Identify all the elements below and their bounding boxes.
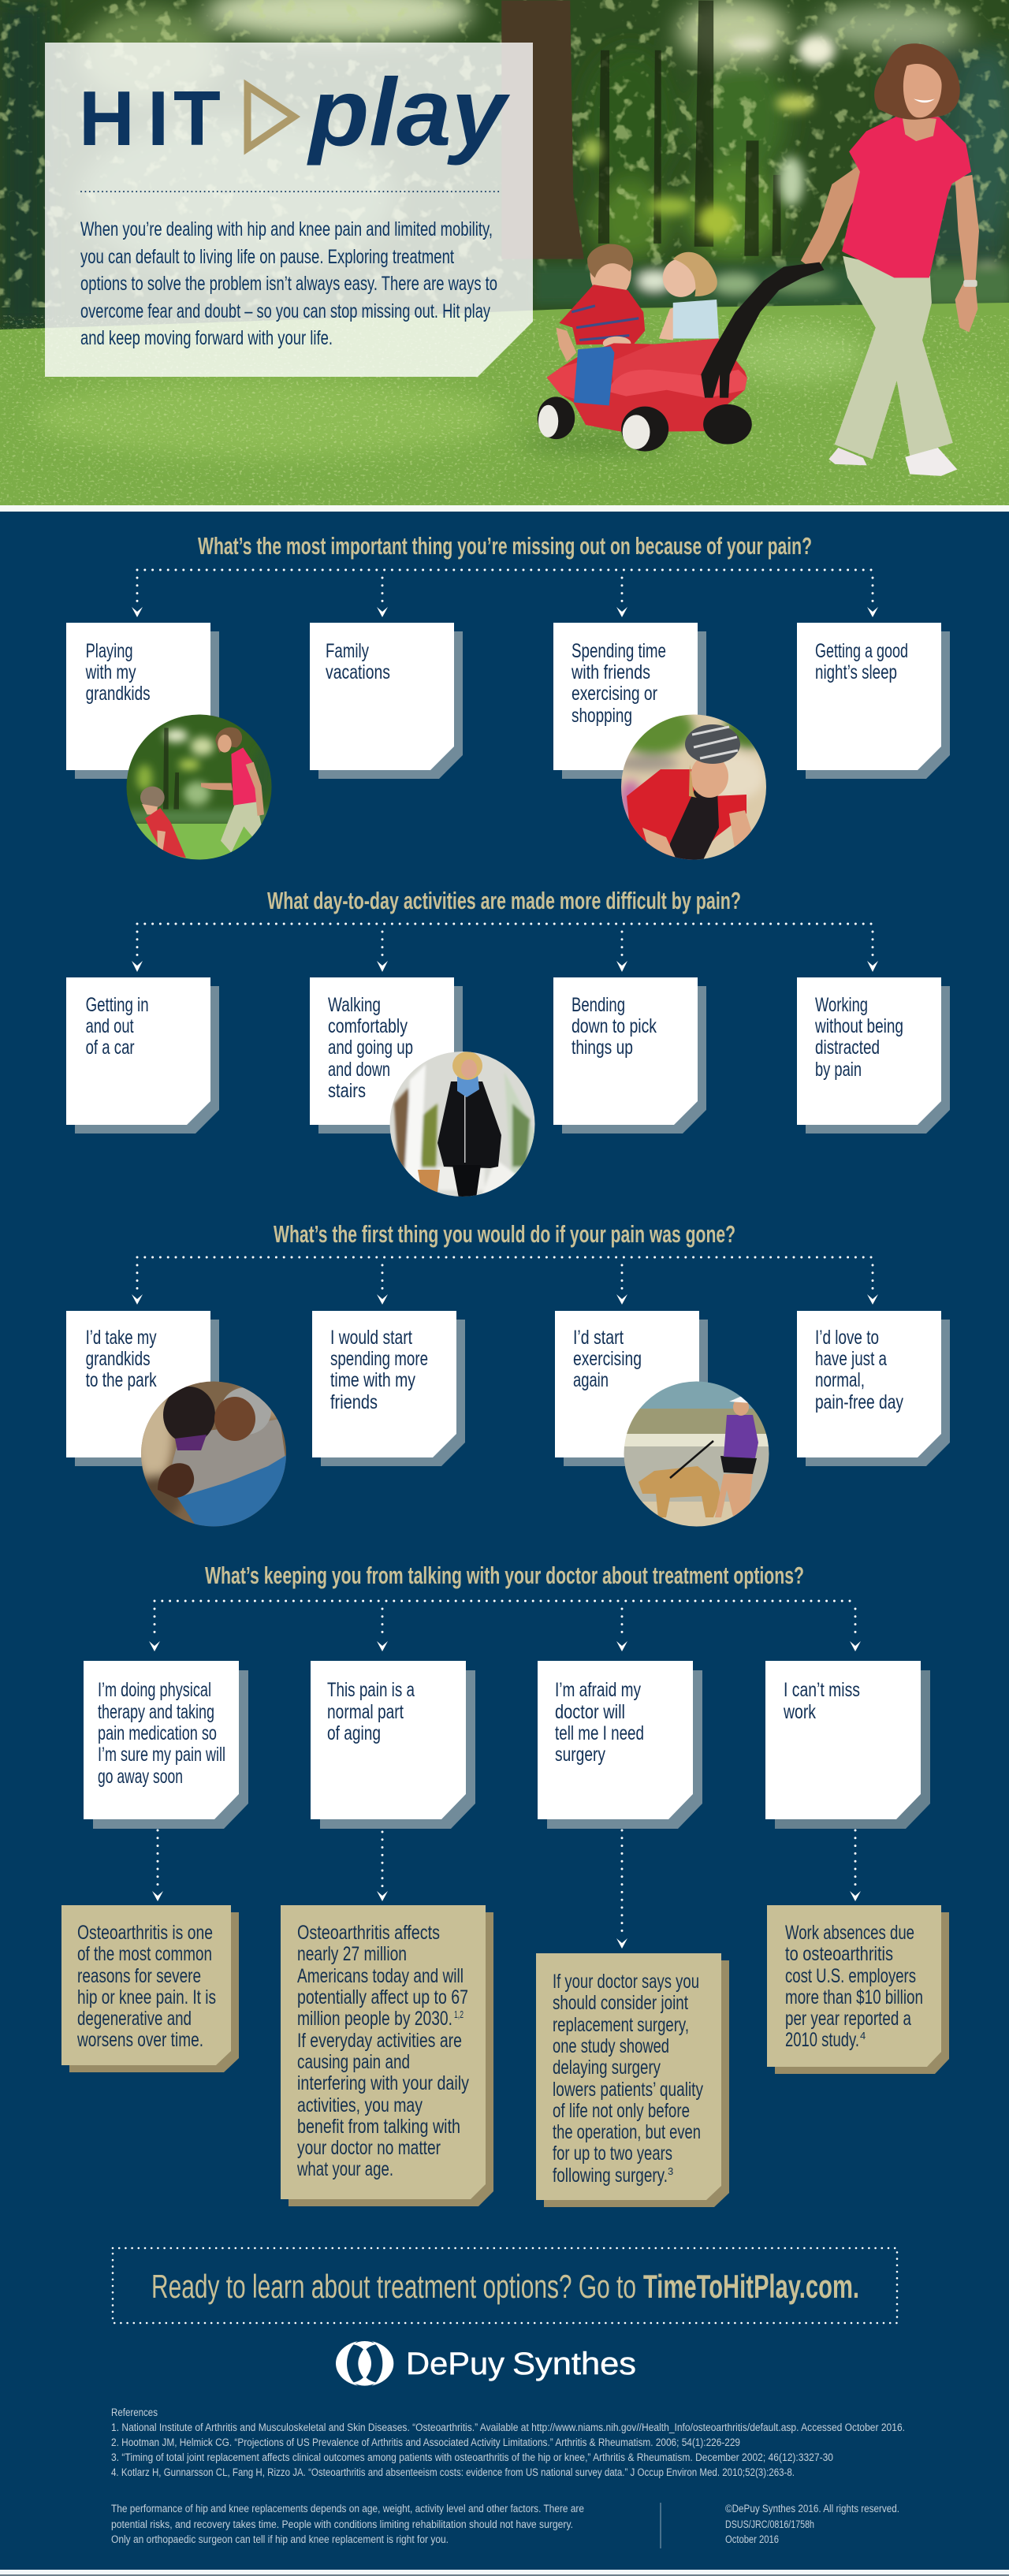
card: time with friends: time with my <box>330 1369 415 1391</box>
dotted connector with arrows <box>132 1257 878 1305</box>
card: playing with grandkids: with my <box>85 661 136 683</box>
card: pain-free day: I’d love to <box>815 1327 879 1349</box>
card: grandkids to the park: I’d take my <box>86 1327 157 1349</box>
fact box: work absences: more than $10 billion <box>785 1986 923 2008</box>
fact box: osteoarthritis reasons: worsens over time. <box>76 2029 203 2051</box>
references: 4. Kotlarz H, Gunnarsson CL, Fang H, Rizzo JA. “Osteoarthritis and absenteeism costs: evidence from US national survey data.” J Occup Environ Med. 2010;52(3):263-8. <box>111 2466 795 2478</box>
references: 1. National Institute of Arthritis and Musculoskeletal and Skin Diseases. “Osteoarthritis.” Available at http://www.niams.nih.gov//Health_Info/osteoarthritis/default.asp. Accessed October 2016. <box>111 2422 905 2433</box>
card: can't miss work: I can’t miss <box>784 1679 860 1701</box>
photo: cyclist <box>621 714 766 859</box>
text: intro paragraph: When you’re dealing with hip and knee pain and limited mobility, <box>80 218 493 240</box>
fact box: osteoarthritis affects millions: Osteoarthritis affects <box>297 1922 440 1944</box>
icon: planter <box>418 1170 440 1192</box>
callout: call to action: Ready to learn about treatment options? Go to <box>151 2268 636 2305</box>
title: Hit play <box>79 58 510 166</box>
section 1: missing out <box>66 532 950 863</box>
card: exercising again <box>555 1311 708 1466</box>
card: walking and stairs: stairs <box>328 1080 366 1102</box>
icon: boy <box>140 787 186 858</box>
card: getting in and out of a car: Getting in <box>86 994 149 1016</box>
card: grandkids to the park: to the park <box>86 1369 157 1391</box>
card: pain-free day: normal, <box>815 1369 865 1391</box>
card: afraid of surgery: doctor will <box>555 1701 625 1723</box>
icon: helmet <box>685 724 740 764</box>
card: time with friends: I would start <box>330 1327 412 1349</box>
card: working without distraction: without being <box>814 1015 903 1037</box>
callout: call to action <box>113 2248 897 2323</box>
card: family vacations: Family <box>326 640 369 662</box>
card: grandkids to the park: grandkids <box>86 1348 151 1370</box>
fact box: delaying surgery: lowers patients’ quality <box>553 2079 703 2101</box>
card: can't miss work <box>765 1661 930 1829</box>
icon: woman walking <box>715 1394 758 1523</box>
card: bending down: things up <box>572 1037 633 1059</box>
fact box: osteoarthritis affects millions: your doctor no matter <box>297 2137 441 2159</box>
section 3: first thing if pain was gone <box>66 1220 950 1529</box>
card: time with friends: spending more <box>330 1348 428 1370</box>
fact box: work absences: 2010 study. <box>785 2029 859 2051</box>
card: physical therapy <box>84 1661 248 1829</box>
dotted connector with arrows <box>132 570 878 617</box>
dotted connector with arrows <box>132 924 878 972</box>
card: getting in and out of a car <box>66 977 219 1134</box>
icon: play triangle <box>248 86 294 148</box>
disclaimer: potential risks, and recovery takes time. People with conditions limiting rehabilitation should not have surgery. <box>111 2518 573 2530</box>
card: exercising again: again <box>573 1369 609 1391</box>
fact box: osteoarthritis reasons <box>61 1905 239 2072</box>
card: physical therapy: I’m doing physical <box>98 1679 211 1701</box>
card: spending time: Spending time <box>572 640 666 662</box>
text: intro paragraph: options to solve the problem isn’t always easy. There are ways to <box>80 273 497 295</box>
heading: What’s the first thing you would do if your pain was gone? <box>274 1220 735 1248</box>
icon: woman in black coat <box>437 1052 501 1198</box>
fact box: delaying surgery: the operation, but even <box>553 2121 701 2143</box>
fact box: delaying surgery: should consider joint <box>553 1992 688 2014</box>
fact box: osteoarthritis affects millions: 1,2 <box>454 2008 464 2020</box>
card: family vacations <box>310 623 463 779</box>
fact box: osteoarthritis reasons: of the most common <box>77 1943 212 1965</box>
fact box: osteoarthritis affects millions: causing pain and <box>297 2051 410 2073</box>
card: good night's sleep <box>797 623 950 779</box>
icon: woman <box>201 728 264 853</box>
copyright: DSUS/JRC/0816/1758h <box>725 2518 814 2530</box>
disclaimer: The performance of hip and knee replacements depends on age, weight, activity level and other factors. There are <box>111 2503 584 2515</box>
card: physical therapy: I’m sure my pain will <box>98 1744 225 1766</box>
card: physical therapy: pain medication so <box>98 1722 217 1744</box>
card: walking and stairs: comfortably <box>328 1015 408 1037</box>
panel: intro with logo and description <box>45 43 533 377</box>
fact box: delaying surgery: delaying surgery <box>553 2057 661 2079</box>
text: intro paragraph <box>80 218 497 349</box>
fact box: delaying surgery: If your doctor says you <box>553 1971 699 1993</box>
fact box: osteoarthritis affects millions: interfering with your daily <box>297 2072 469 2094</box>
copyright: ©DePuy Synthes 2016. All rights reserved. <box>725 2503 899 2515</box>
card: afraid of surgery <box>538 1661 702 1829</box>
dotted connector with arrows <box>149 1601 861 1651</box>
card: time with friends: friends <box>330 1391 378 1413</box>
fact box: osteoarthritis affects millions: million people by 2030. <box>297 2008 452 2030</box>
fact box: delaying surgery: of life not only before <box>553 2100 690 2122</box>
card: working without distraction <box>797 977 950 1134</box>
fact box: osteoarthritis reasons: hip or knee pain. It is <box>77 1986 216 2008</box>
hero photo: grandmother pulling children in a red wagon <box>0 0 1009 505</box>
references: 3. “Timing of total joint replacement affects clinical outcomes among patients with osteoarthritis of the hip or knee,” Arthritis & Rheumatism. December 2002; 46(12):3327-30 <box>111 2451 833 2463</box>
fact box: osteoarthritis affects millions: activities, you may <box>297 2094 423 2116</box>
logo: DePuy Synthes <box>336 2340 636 2388</box>
fact box: delaying surgery: for up to two years <box>553 2142 672 2165</box>
card: walking and stairs: and down <box>328 1059 390 1081</box>
photo: hug <box>141 1381 286 1526</box>
card: physical therapy: therapy and taking <box>98 1701 214 1723</box>
card: afraid of surgery: surgery <box>555 1744 605 1766</box>
icon: wagon handle <box>701 262 825 398</box>
text: intro paragraph: overcome fear and doubt – so you can stop missing out. Hit play <box>80 300 490 322</box>
section 2: day-to-day activities <box>66 887 950 1202</box>
fact box: osteoarthritis affects millions: Americans today and will <box>297 1965 464 1987</box>
card: pain-free day: have just a <box>815 1348 887 1370</box>
callout: call to action: TimeToHitPlay.com. <box>643 2268 859 2305</box>
card: good night's sleep: night’s sleep <box>815 661 897 683</box>
card: exercising again: exercising <box>573 1348 642 1370</box>
photo: grandmother and grandson in park <box>124 712 276 862</box>
fact box: osteoarthritis affects millions <box>281 1905 493 2206</box>
fact box: work absences <box>767 1905 949 2074</box>
card: working without distraction: Working <box>815 994 868 1016</box>
fact box: work absences: per year reported a <box>785 2008 911 2030</box>
card: spending time <box>553 623 706 779</box>
card: normal part of aging: This pain is a <box>327 1679 415 1701</box>
card: pain-free day: pain-free day <box>815 1391 903 1413</box>
title: Hit play: HIT <box>79 75 221 162</box>
card: can't miss work: work <box>783 1701 816 1723</box>
card: afraid of surgery: I’m afraid my <box>555 1679 641 1701</box>
white divider under hero <box>0 505 1009 512</box>
copyright: October 2016 <box>725 2533 779 2545</box>
card: pain-free day <box>797 1311 950 1466</box>
references: References <box>111 2407 158 2418</box>
grass <box>0 303 1009 505</box>
heading: What day-to-day activities are made more difficult by pain? <box>267 887 741 914</box>
card: grandkids to the park <box>66 1311 219 1466</box>
card: family vacations: vacations <box>326 661 390 683</box>
fact box: work absences: to osteoarthritis <box>785 1943 893 1965</box>
card: walking and stairs <box>310 977 463 1134</box>
fact box: delaying surgery: one study showed <box>553 2035 669 2057</box>
fact box: delaying surgery: replacement surgery, <box>553 2014 689 2036</box>
card: normal part of aging: normal part <box>327 1701 404 1723</box>
disclaimer <box>111 2503 584 2545</box>
card: playing with grandkids: grandkids <box>86 683 151 705</box>
card: time with friends <box>312 1311 465 1466</box>
icon: dog <box>639 1441 721 1517</box>
fact box: work absences: cost U.S. employers <box>785 1965 916 1987</box>
references: 2. Hootman JM, Helmick CG. “Projections of US Prevalence of Arthritis and Associated Activity Limitations.” Arthritis & Rheumatism. 2006; 54(1):226-229 <box>111 2436 740 2448</box>
card: bending down: Bending <box>572 994 625 1016</box>
card: working without distraction: distracted <box>815 1037 880 1059</box>
foliage highlights <box>0 0 1009 307</box>
fact box: osteoarthritis affects millions: what your age. <box>296 2158 393 2180</box>
text: intro paragraph: and keep moving forward with your life. <box>80 327 333 349</box>
fact box: osteoarthritis affects millions: If everyday activities are <box>297 2030 462 2052</box>
fact box: work absences: Work absences due <box>785 1922 914 1944</box>
fact box: osteoarthritis affects millions: benefit from talking with <box>297 2116 460 2138</box>
fact box: work absences: 4 <box>860 2030 866 2042</box>
fact box: delaying surgery: following surgery. <box>553 2165 668 2187</box>
card: physical therapy: go away soon <box>98 1766 183 1788</box>
logo: DePuy Synthes: DePuy <box>406 2347 504 2381</box>
icon: woman <box>801 43 979 476</box>
fact box: osteoarthritis reasons: Osteoarthritis is one <box>77 1922 213 1944</box>
card: playing with grandkids <box>66 623 219 779</box>
icon: boy <box>556 244 645 362</box>
fact box: delaying surgery <box>536 1953 729 2207</box>
card: exercising again: I’d start <box>573 1327 624 1349</box>
references <box>111 2407 905 2478</box>
section 4: keeping you from talking with doctor <box>61 1562 949 2207</box>
card: walking and stairs: and going up <box>328 1037 413 1059</box>
fact box: osteoarthritis reasons: degenerative and <box>77 2008 192 2030</box>
card: bending down <box>553 977 706 1134</box>
fact box: osteoarthritis reasons: reasons for severe <box>77 1965 201 1987</box>
fact box: osteoarthritis affects millions: potentially affect up to 67 <box>297 1986 468 2008</box>
bottom white strip <box>0 2570 1009 2576</box>
card: afraid of surgery: tell me I need <box>555 1722 644 1744</box>
card: spending time: exercising or <box>572 683 657 705</box>
fact box: osteoarthritis affects millions: nearly 27 million <box>297 1943 407 1965</box>
card: bending down: down to pick <box>572 1015 657 1037</box>
photo: woman on stairs <box>389 1052 534 1197</box>
icon: girl <box>659 252 719 340</box>
card: walking and stairs: Walking <box>328 994 381 1016</box>
icon: logo mark <box>336 2340 393 2388</box>
card: spending time: with friends <box>571 661 650 683</box>
card: good night's sleep: Getting a good <box>815 640 908 662</box>
card: playing with grandkids: Playing <box>86 640 133 662</box>
dotted connectors to fact boxes <box>152 1830 861 1949</box>
card: getting in and out of a car: of a car <box>86 1037 135 1059</box>
title: Hit play: play <box>307 58 510 166</box>
text: intro paragraph: you can default to living life on pause. Exploring treatment <box>80 246 454 268</box>
logo: DePuy Synthes: Synthes <box>512 2347 636 2381</box>
card: spending time: shopping <box>572 705 632 727</box>
fact box: delaying surgery: 3 <box>668 2165 673 2177</box>
card: normal part of aging: of aging <box>327 1722 381 1744</box>
disclaimer: Only an orthopaedic surgeon can tell if hip and knee replacement is right for you. <box>111 2533 449 2545</box>
photo: woman walking dog on beach <box>623 1379 773 1529</box>
card: normal part of aging <box>311 1661 475 1829</box>
card: getting in and out of a car: and out <box>86 1015 134 1037</box>
card: working without distraction: by pain <box>815 1059 862 1081</box>
icon: red wagon <box>538 338 752 452</box>
copyright <box>725 2503 899 2545</box>
